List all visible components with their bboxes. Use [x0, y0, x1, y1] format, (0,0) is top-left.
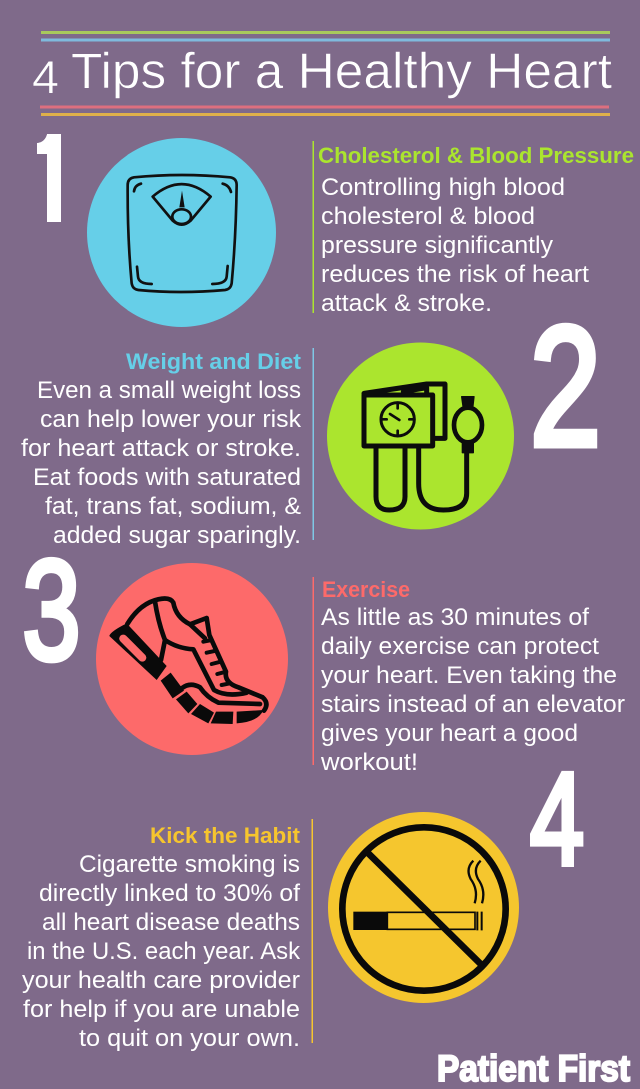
heading: Kick the Habit — [150, 823, 301, 848]
icon: no smoking — [328, 812, 519, 1003]
icon: blood pressure monitor — [327, 342, 514, 530]
vertical rule — [312, 141, 314, 313]
header: title with coloured rules — [32, 31, 612, 116]
icon: running shoe — [96, 563, 288, 755]
body text — [321, 174, 589, 317]
body text: stairs instead of an elevator — [321, 691, 625, 718]
number 1 — [37, 134, 61, 222]
panel: tip 4 kick the habit — [22, 745, 584, 1052]
body text: for heart attack or stroke. — [21, 435, 301, 462]
title: 4 — [32, 51, 59, 103]
number 3: 3 — [22, 531, 80, 690]
body text: in the U.S. each year. Ask — [27, 938, 301, 965]
panel: tip 2 weight and diet — [21, 292, 601, 549]
title: Tips for a Healthy Heart — [71, 43, 612, 99]
number 2: 2 — [530, 292, 601, 482]
body text: daily exercise can protect — [321, 633, 599, 660]
body text: Even a small weight loss — [37, 377, 301, 404]
panel: tip 3 exercise — [22, 531, 625, 776]
body text: for help if you are unable — [23, 996, 300, 1023]
heading: Weight and Diet — [126, 349, 302, 374]
vertical rule — [312, 819, 313, 1043]
body text: added sugar sparingly. — [53, 522, 301, 549]
body text: your health care provider — [22, 967, 300, 994]
body text — [320, 604, 625, 776]
body text: Eat foods with saturated — [33, 464, 301, 491]
body text: to quit on your own. — [79, 1025, 300, 1052]
body text — [21, 377, 302, 549]
body text: gives your heart a good — [321, 720, 578, 747]
body text: Controlling high blood — [321, 174, 565, 201]
heading: Cholesterol & Blood Pressure — [318, 143, 634, 168]
body text: can help lower your risk — [40, 406, 302, 433]
number 4: 4 — [530, 745, 584, 892]
body text: As little as 30 minutes of — [321, 604, 589, 631]
icon: bathroom scale — [87, 138, 276, 327]
body text: reduces the risk of heart — [321, 261, 589, 288]
body text: fat, trans fat, sodium, & — [45, 493, 301, 520]
panel: tip 1 cholesterol and blood pressure — [37, 134, 634, 327]
body text: your heart. Even taking the — [321, 662, 617, 689]
body text: directly linked to 30% of — [39, 880, 300, 907]
body text — [22, 851, 301, 1052]
body text: all heart disease deaths — [42, 909, 300, 936]
heading: Exercise — [322, 577, 410, 602]
number 1: 1 — [34, 112, 74, 248]
body text: workout! — [320, 749, 418, 776]
body text: attack & stroke. — [321, 290, 492, 317]
body text: pressure significantly — [321, 232, 553, 259]
vertical rule — [312, 348, 314, 540]
body text: Cigarette smoking is — [79, 851, 300, 878]
body text: cholesterol & blood — [321, 203, 535, 230]
vertical rule — [312, 577, 314, 765]
